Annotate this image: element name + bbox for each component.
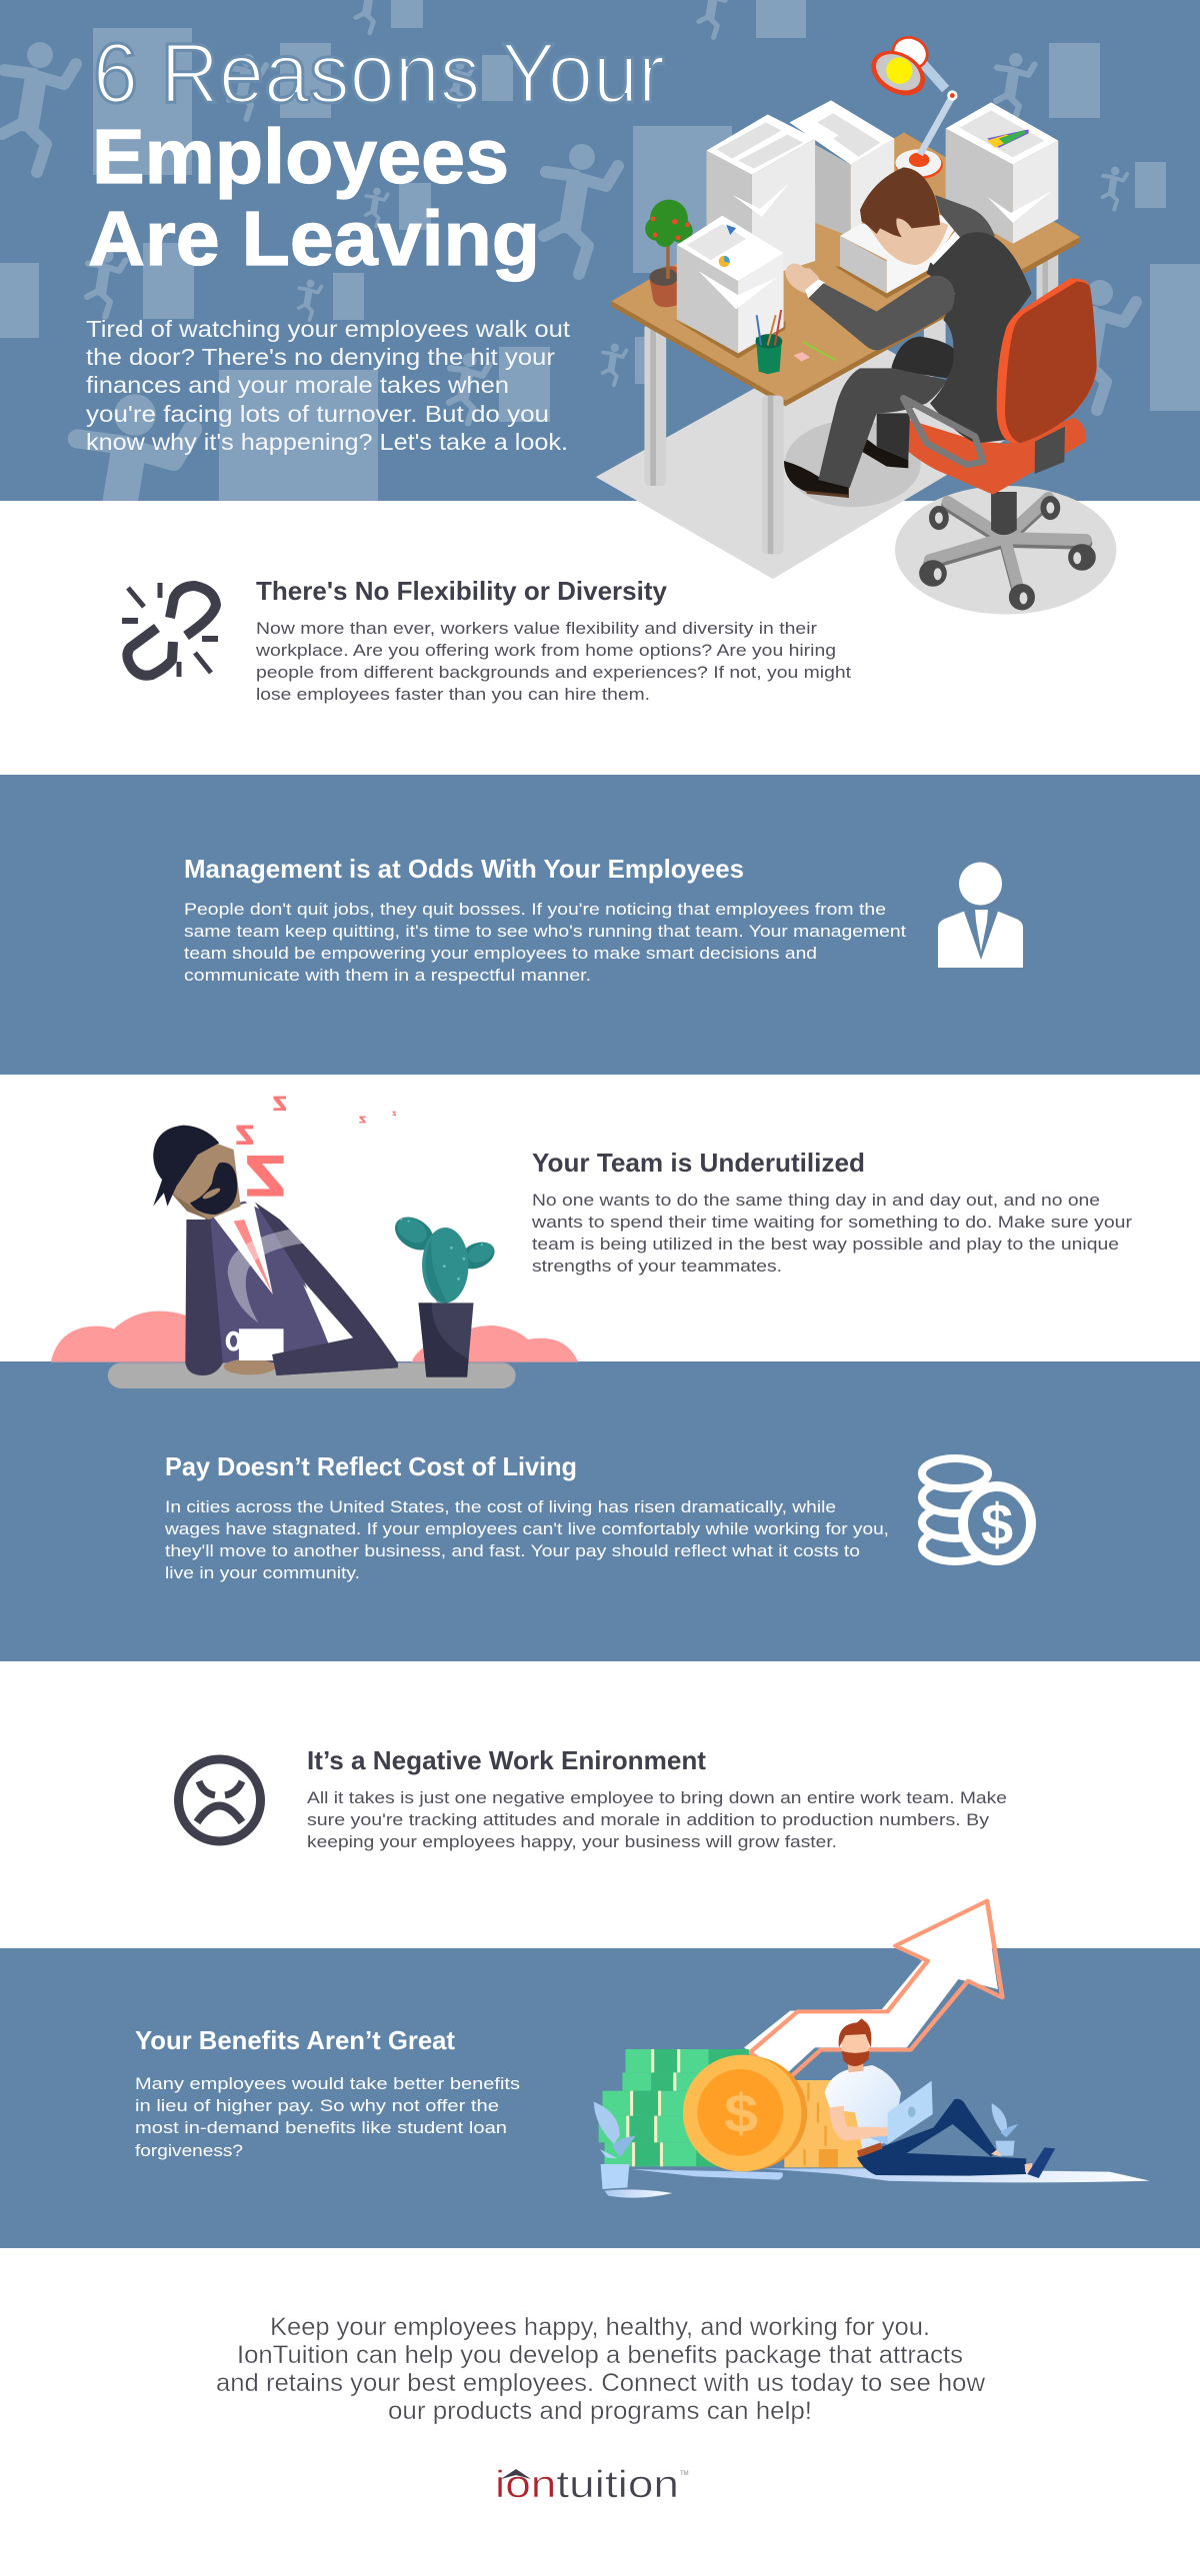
seat (892, 418, 1086, 495)
right plant (992, 2103, 1007, 2132)
body text: Now more than ever, workers value flexibility and diversity in their (256, 619, 817, 638)
intro text: know why it's happening? Let's take a look. (86, 429, 568, 455)
collar, face and hair (930, 232, 960, 265)
logo: iontuition: TM (680, 2471, 689, 2477)
icon: angry face (178, 1759, 260, 1841)
closing message (216, 2313, 986, 2425)
panel: negative work environment (178, 1745, 1007, 1851)
title: 6 Reasons Your (93, 26, 665, 120)
closing message: IonTuition can help you develop a benefits package that attracts (237, 2341, 963, 2369)
panel: pay doesn't reflect cost of living (0, 1361, 1200, 1661)
panel: benefits aren't great (0, 1901, 1200, 2248)
body text: forgiveness? (135, 2141, 243, 2160)
heading: There's No Flexibility or Diversity (256, 576, 668, 606)
icon: coin stack with dollar (922, 1458, 1031, 1561)
chair back (1035, 427, 1065, 474)
title (88, 26, 665, 282)
body text (135, 2074, 520, 2160)
panel: team is underutilized (51, 1097, 1132, 1388)
illustration: man with laptop, money and rising arrow: $ (724, 2084, 758, 2143)
man (824, 2065, 901, 2151)
body text: live in your community. (165, 1563, 360, 1582)
hand, cuff and sleeve (785, 263, 820, 293)
closing message: Keep your employees happy, healthy, and working for you. (270, 2313, 930, 2341)
body text: All it takes is just one negative employee to bring down an entire work team. Make (307, 1788, 1007, 1807)
pens (756, 337, 782, 374)
body text: communicate with them in a respectful manner. (184, 966, 591, 985)
heading: Your Benefits Aren’t Great (135, 2025, 455, 2055)
body text: In cities across the United States, the cost of living has risen dramatically, while (165, 1497, 836, 1516)
heading: Pay Doesn’t Reflect Cost of Living (165, 1451, 577, 1481)
back leg and shoe (862, 437, 908, 468)
body text: same team keep quitting, it's time to see who's running that team. Your management (184, 922, 906, 941)
body text (184, 900, 906, 985)
icon: broken chain link (122, 583, 218, 677)
body text: Many employees would take better benefits (135, 2074, 520, 2093)
armrest (903, 398, 983, 465)
intro text: Tired of watching your employees walk out (86, 316, 571, 342)
body text: in lieu of higher pay. So why not offer the (135, 2096, 499, 2115)
stack left big (706, 114, 815, 175)
body text (255, 619, 851, 704)
body text: people from different backgrounds and experiences? If not, you might (256, 663, 851, 682)
illustration: bored sleeping worker with cactus (51, 1097, 578, 1388)
body text (531, 1191, 1132, 1276)
body text: No one wants to do the same thing day in and day out, and no one (532, 1191, 1100, 1210)
panel: no flexibility or diversity (122, 576, 851, 704)
closing message: and retains your best employees. Connect with us today to see how (216, 2369, 986, 2397)
lamp (895, 150, 943, 179)
front shoe (784, 461, 849, 498)
body text: lose employees faster than you can hire them. (256, 685, 650, 704)
title: Are Leaving (88, 196, 540, 282)
back arm (935, 195, 995, 237)
body text: they'll move to another business, and fast. Your pay should reflect what it costs to (165, 1541, 860, 1560)
closing message: our products and programs can help! (388, 2397, 812, 2425)
left plant (594, 2102, 620, 2144)
body text (164, 1497, 889, 1582)
stack under head (835, 267, 928, 298)
logo: iontuition: ion tuition (495, 2464, 679, 2506)
body text: team is being utilized in the best way possible and play to the unique (532, 1235, 1119, 1254)
body text: People don't quit jobs, they quit bosses. If you're noticing that employees from the (184, 900, 886, 919)
plant (649, 266, 677, 307)
heading: Management is at Odds With Your Employees (184, 854, 744, 884)
body text: most in-demand benefits like student loan (135, 2118, 507, 2137)
body text: wages have stagnated. If your employees can't live comfortably while working for you, (164, 1519, 889, 1538)
torso (927, 232, 1032, 443)
intro text: you're facing lots of turnover. But do you (86, 401, 549, 427)
panel: management at odds (0, 775, 1200, 1075)
stack front small (677, 216, 784, 281)
body text: strengths of your teammates. (532, 1257, 782, 1276)
body text: wants to spend their time waiting for something to do. Make sure your (531, 1213, 1132, 1232)
title: Employees (92, 114, 509, 200)
illustration: man with laptop, money and rising arrow (594, 1901, 1150, 2198)
illustration: overworked employee at desk (596, 33, 1116, 614)
stack right (946, 102, 1058, 165)
stack back (789, 100, 894, 165)
intro text: finances and your morale takes when (86, 372, 509, 398)
body text: sure you're tracking attitudes and morale in addition to production numbers. By (307, 1810, 990, 1829)
front leg (818, 368, 947, 488)
panel: hero banner (0, 0, 1200, 621)
intro text: the door? There's no denying the hit your (86, 344, 555, 370)
heading: It’s a Negative Work Enironment (307, 1745, 706, 1775)
lap (892, 337, 954, 378)
body text (307, 1788, 1007, 1851)
icon: coin stack with dollar: $ (981, 1492, 1013, 1557)
intro text (86, 316, 571, 455)
body text: workplace. Are you offering work from home options? Are you hiring (255, 641, 836, 660)
icon: person in suit (938, 862, 1023, 968)
chair base (930, 501, 1086, 594)
heading: Your Team is Underutilized (532, 1148, 865, 1178)
body text: keeping your employees happy, your business will grow faster. (307, 1832, 837, 1851)
body text: team should be empowering your employees to make smart decisions and (184, 944, 817, 963)
